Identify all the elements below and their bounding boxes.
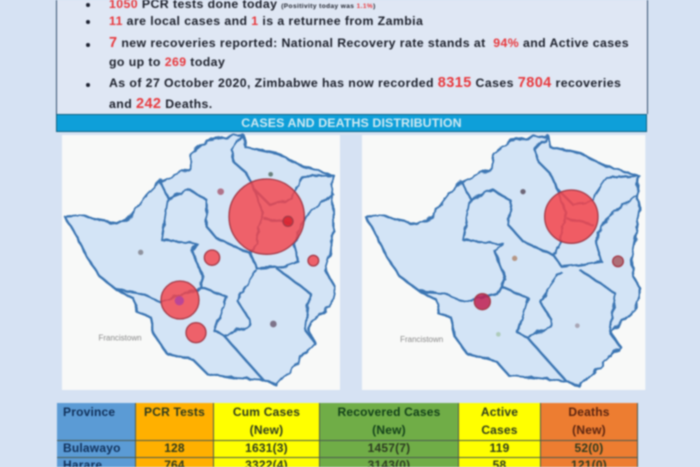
row: Harare: [56, 457, 638, 467]
row: Bulawayo: 1631(3): [245, 441, 288, 455]
panel: summary: [56, 0, 648, 114]
header row: Cases: [481, 423, 518, 437]
map: cases distribution: [62, 132, 340, 390]
header row: Province: [63, 405, 115, 419]
header row: Active: [481, 405, 518, 419]
text: active cases: go up to 269 today: [109, 55, 225, 69]
table: provincial statistics: [57, 403, 638, 467]
label: neighbouring country: Francistown: [400, 335, 443, 344]
header row: Recovered Cases: [337, 405, 441, 419]
country and province shapes: [366, 136, 642, 387]
text: cumulative totals: As of 27 October 2020, Zimbabwe has now recorded 8315 Cases 7804 recoveries: [109, 75, 621, 91]
row: Bulawayo: 128: [164, 441, 185, 455]
map: deaths distribution: [362, 133, 646, 390]
row: Bulawayo: 1457(7): [368, 441, 410, 455]
bubbles: cases by province: [138, 172, 319, 343]
text: local cases: 11 are local cases and 1 is a returnee from Zambia: [109, 14, 423, 28]
row: Bulawayo: Bulawayo: [63, 441, 121, 455]
header row: [56, 402, 638, 442]
header row: (New): [372, 423, 406, 437]
heading: cases and deaths distribution: [56, 114, 647, 132]
row: Bulawayo: 119: [490, 441, 509, 455]
row: Bulawayo: [56, 440, 638, 458]
text: deaths: and 242 Deaths.: [109, 96, 213, 112]
row: Bulawayo: 52(0): [574, 441, 604, 455]
header row: PCR Tests: [144, 405, 205, 419]
header row: (New): [250, 423, 283, 437]
bubbles: deaths by province: [474, 189, 623, 337]
header row: (New): [572, 423, 606, 437]
header row: Cum Cases: [233, 405, 300, 419]
text: recoveries: 7 new recoveries reported: National Recovery rate stands at 94% and Active cases: [109, 35, 629, 51]
country and province shapes: [65, 135, 335, 385]
bullet list: daily summary: [85, 0, 629, 112]
header row: Deaths: [568, 405, 610, 419]
label: neighbouring country: Francistown: [98, 334, 142, 343]
heading: cases and deaths distribution: CASES AND DEATHS DISTRIBUTION: [241, 116, 462, 130]
